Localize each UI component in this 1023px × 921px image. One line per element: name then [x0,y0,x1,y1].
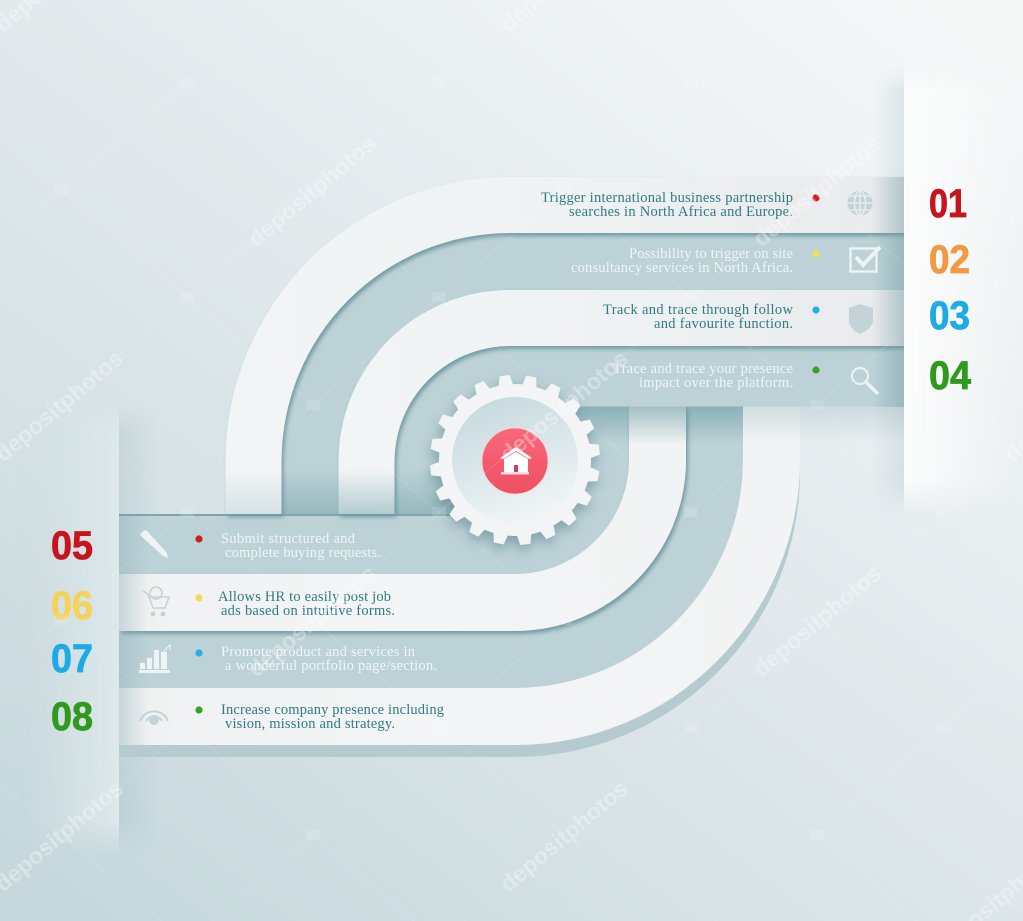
text: item 03: Track and trace through follow [603,302,794,318]
gear inner disc [452,397,578,523]
text: item 07: a wonderful portfolio page/section. [225,658,437,674]
text: item 05: Submit structured and [221,531,356,547]
band 07 teal [119,406,743,688]
gear [430,375,600,545]
numbers right: 02 [929,238,970,282]
icon: globe [848,190,872,216]
shadow beside right column [884,74,904,500]
shadow beside left column [119,418,141,834]
numbers left [51,524,93,739]
icon: shopping cart [143,587,169,616]
text: item 03 [603,302,794,332]
text: item 06: ads based on intuitive forms. [221,603,395,619]
red hub [482,428,548,494]
text: item 01 [541,190,793,220]
watermarks: depositphotos [495,775,633,897]
gear teeth and body [430,375,600,545]
text: item 04: Trace and trace your presence [613,361,793,377]
shadow at left end of strips [119,514,149,745]
bullets [195,194,820,714]
band 02 teal [282,233,904,514]
band 05 teal [119,406,629,574]
text: item 02 [571,246,793,276]
text: item 07: Promote product and services in [221,644,416,660]
panel: right number column [904,89,974,500]
text: item 02: Possibility to trigger on site [629,246,793,262]
numbers right: 04 [929,354,972,398]
band 03 white [338,290,904,514]
panel: left number column [64,474,119,840]
top edge line on strip 05 [119,514,464,516]
icon: bar chart [139,645,170,673]
numbers left: 07 [51,637,93,681]
shadow at right end of strips [872,177,904,407]
numbers left: 06 [51,584,93,628]
watermarks: depositphotos [495,345,633,467]
icon: shield [849,304,873,334]
band 04 teal [394,346,904,514]
numbers right: 01 [929,182,967,226]
text: item 08: Increase company presence including [221,702,444,718]
text: item 01: Trigger international business partnership [541,190,793,206]
text: item 08: vision, mission and strategy. [225,716,395,732]
icon: pencil [140,530,168,558]
numbers left: 08 [51,695,93,739]
text: item 05 [221,531,381,561]
lower band set: strips 05-08 curving up [119,406,800,757]
watermark camera marks [54,78,950,840]
watermarks: depositphotos [748,560,886,682]
icon: house [500,447,532,474]
text: item 06 [218,589,395,619]
text: item 08 [221,702,444,732]
text: item 05: complete buying requests. [225,545,381,561]
icon: signal arcs [140,711,168,725]
band 08 white [119,406,800,745]
numbers right [929,182,972,398]
strip 04 shadow over lower rings [569,406,743,444]
lower shadow crescent [119,460,800,757]
band 01 white [226,177,904,514]
upper band set: strips 01-04 curving down [226,177,904,514]
band 06 white [119,406,686,631]
lower fade on inner upper rings [282,469,472,514]
text: item 04: impact over the platform. [639,375,793,391]
lower fade on outer upper ring [226,469,282,514]
text: item 06: Allows HR to easily post job [218,589,391,605]
watermarks: depositphotos [243,560,381,682]
numbers left: 05 [51,524,93,568]
icon: magnifier [852,368,877,393]
icon: checkbox [850,247,880,272]
text: item 01: searches in North Africa and Europe. [569,204,793,220]
text: item 07 [221,644,437,674]
text: item 04 [613,361,793,391]
numbers right: 03 [929,294,970,338]
text: item 02: consultancy services in North Africa. [571,260,793,276]
watermarks: depositphotos [243,130,381,252]
strip 04 faint shadow right part [743,406,904,442]
text: item 03: and favourite function. [654,316,793,332]
watermarks: depositphotos [748,130,886,252]
